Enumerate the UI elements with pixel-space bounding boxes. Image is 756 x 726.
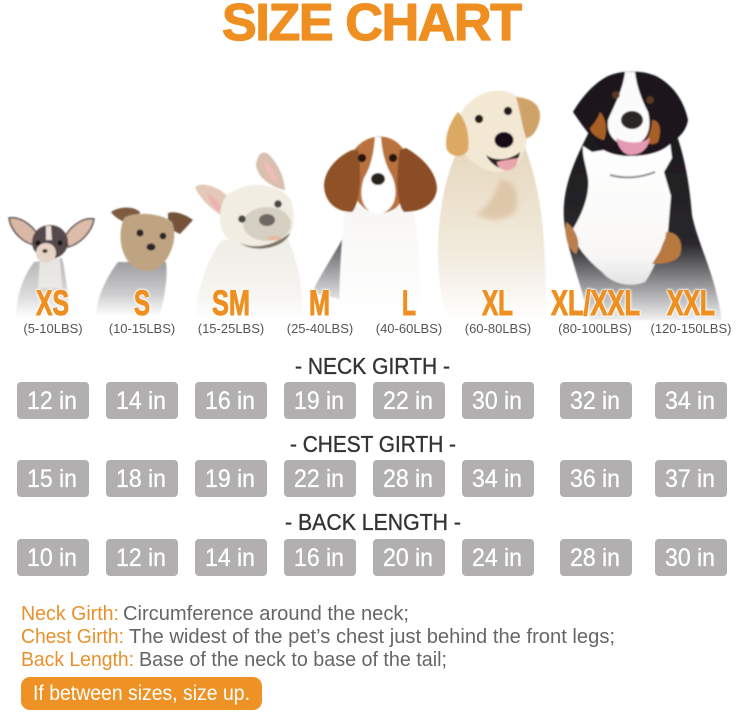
row: neck girth values: 19 in [294, 387, 344, 415]
heading: back length: - BACK LENGTH - [285, 509, 461, 535]
row: chest girth values: 34 in [472, 465, 522, 493]
row: chest girth values [17, 460, 727, 497]
weight ranges: (5-10LBS) [23, 321, 83, 336]
dog: M beagle [312, 136, 437, 320]
heading: neck girth: - NECK GIRTH - [295, 353, 450, 379]
row: neck girth values: 16 in [205, 387, 255, 415]
definitions text block: Base of the neck to base of the tail; [139, 649, 447, 671]
row: back length values: 10 in [27, 544, 77, 572]
definitions text block: Circumference around the neck; [123, 603, 409, 625]
row: neck girth values: 22 in [383, 387, 433, 415]
weight ranges: (120-150LBS) [651, 321, 731, 336]
row: back length values: 16 in [294, 544, 344, 572]
size labels [36, 284, 715, 323]
row: neck girth values [17, 382, 727, 419]
row: neck girth values: 12 in [27, 387, 77, 415]
dog: S yorkie [96, 207, 193, 316]
definitions text block: Neck Girth: [21, 603, 119, 625]
size labels: SM [212, 284, 250, 323]
row: chest girth values: 28 in [383, 465, 433, 493]
weight ranges: (80-100LBS) [558, 321, 632, 336]
row: back length values: 30 in [665, 544, 715, 572]
row: back length values: 12 in [116, 544, 166, 572]
weight ranges: (15-25LBS) [198, 321, 264, 336]
callout: if between sizes: If between sizes, size up. [33, 682, 250, 705]
size labels: XS [36, 284, 69, 323]
definitions text block: The widest of the pet’s chest just behind the front legs; [129, 626, 615, 648]
definitions text block: Back Length: [21, 649, 134, 671]
dog: SM french bulldog [194, 153, 303, 320]
row: back length values: 28 in [570, 544, 620, 572]
row: chest girth values: 18 in [116, 465, 166, 493]
size labels: XL/XXL [551, 284, 640, 323]
definitions text block: Chest Girth: [21, 626, 124, 648]
dog: XS chihuahua [9, 218, 94, 318]
heading: chest girth: - CHEST GIRTH - [290, 431, 456, 457]
weight ranges: (60-80LBS) [465, 321, 531, 336]
size labels: S [134, 284, 150, 323]
row: chest girth values: 19 in [205, 465, 255, 493]
row: neck girth values: 32 in [570, 387, 620, 415]
row: back length values: 24 in [472, 544, 522, 572]
row: chest girth values: 22 in [294, 465, 344, 493]
row: back length values: 14 in [205, 544, 255, 572]
row: neck girth values: 14 in [116, 387, 166, 415]
size labels: M [309, 284, 330, 323]
row: neck girth values: 30 in [472, 387, 522, 415]
row: back length values [17, 539, 727, 576]
dog: XL bernese mountain dog [564, 72, 722, 320]
row: chest girth values: 37 in [665, 465, 715, 493]
row: chest girth values: 15 in [27, 465, 77, 493]
row: back length values: 20 in [383, 544, 433, 572]
weight ranges: (10-15LBS) [109, 321, 175, 336]
weight ranges: (25-40LBS) [287, 321, 353, 336]
callout: if between sizes [21, 677, 262, 710]
size labels: XL [482, 284, 513, 323]
dog: L golden retriever [438, 91, 546, 320]
weight ranges: (40-60LBS) [376, 321, 442, 336]
row: chest girth values: 36 in [570, 465, 620, 493]
size labels: XXL [667, 284, 715, 323]
definitions text block [21, 603, 615, 671]
size labels: L [402, 284, 416, 323]
weight ranges [23, 321, 731, 336]
row: neck girth values: 34 in [665, 387, 715, 415]
